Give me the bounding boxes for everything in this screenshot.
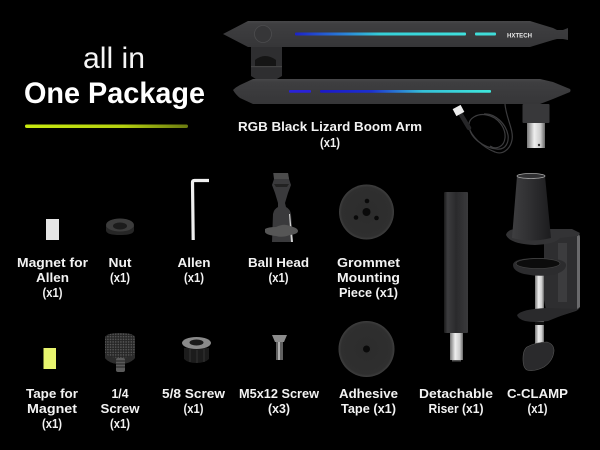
lower arm [233, 79, 570, 104]
label: adhesive tape [339, 386, 398, 416]
label: M5x12 screw: (x3) [268, 401, 290, 416]
yellow-green underline [25, 124, 188, 128]
label: tape for magnet: Tape for [26, 386, 78, 401]
icon: adhesive tape [338, 321, 394, 377]
title: all in One Package [24, 42, 205, 110]
icon: magnet [46, 219, 59, 240]
label: detachable riser: Detachable [419, 386, 493, 401]
label: magnet for allen [17, 255, 88, 300]
pad [513, 258, 566, 276]
label: nut: Nut [108, 255, 132, 270]
label: ball head: (x1) [268, 270, 288, 285]
label: detachable riser [419, 386, 493, 416]
label: magnet for allen: Allen [36, 270, 69, 285]
label: ball head: Ball Head [248, 255, 309, 270]
back plate [544, 234, 580, 320]
top plate [506, 229, 580, 245]
icon: 1/4 screw [105, 333, 135, 372]
label: allen [178, 255, 211, 285]
USB cable [469, 104, 512, 153]
arm connector [522, 104, 550, 123]
icon: M5x12 screw [272, 335, 287, 360]
label: C-clamp: (x1) [528, 401, 548, 416]
label: magnet for allen: Magnet for [17, 255, 88, 270]
label: C-clamp [507, 386, 568, 416]
label: 1/4 screw: Screw [100, 401, 140, 416]
label: tape for magnet: (x1) [42, 416, 62, 431]
icon: ball head [265, 173, 298, 242]
label: boom arm [238, 119, 422, 150]
title: all in One Package: all in [83, 42, 145, 75]
upper arm [223, 21, 568, 47]
label: tape for magnet [26, 386, 78, 431]
label: detachable riser: Riser (x1) [428, 402, 484, 416]
label: boom arm: RGB Black Lizard Boom Arm [238, 119, 422, 134]
icon: 5/8 screw [182, 337, 211, 363]
label: adhesive tape: Adhesive [339, 386, 398, 401]
label: 1/4 screw: (x1) [110, 416, 130, 431]
label: magnet for allen: (x1) [42, 285, 62, 300]
icon: allen key [192, 180, 209, 240]
label: 1/4 screw: 1/4 [112, 386, 129, 401]
icon: C-clamp [506, 174, 580, 371]
label: nut: (x1) [110, 270, 130, 285]
label: grommet mounting piece: Mounting [337, 270, 400, 285]
pressure screw upper [535, 272, 544, 344]
label: M5x12 screw [239, 386, 320, 416]
label: grommet mounting piece [337, 255, 401, 300]
label: nut [108, 255, 132, 285]
label: C-clamp: C-CLAMP [507, 386, 568, 401]
icon: detachable riser [444, 192, 468, 362]
icon: tape for magnet [44, 348, 56, 369]
label: boom arm: (x1) [320, 135, 340, 150]
knob [523, 342, 554, 371]
icon: nut [106, 218, 134, 235]
label: M5x12 screw: M5x12 Screw [239, 386, 320, 401]
icon: RGB boom arm: HXTECH [507, 32, 532, 40]
icon: RGB boom arm [223, 21, 570, 153]
arm joint [251, 46, 282, 83]
icon: grommet mounting piece [339, 184, 394, 240]
label: adhesive tape: Tape (x1) [341, 402, 396, 416]
label: 5/8 screw: 5/8 Screw [162, 386, 226, 401]
label: tape for magnet: Magnet [27, 401, 78, 416]
cone [512, 174, 551, 240]
label: grommet mounting piece: Piece (x1) [339, 286, 398, 300]
label: allen: (x1) [184, 270, 204, 285]
label: grommet mounting piece: Grommet [337, 255, 401, 270]
label: 5/8 screw: (x1) [184, 401, 204, 416]
label: allen: Allen [178, 255, 211, 270]
label: 5/8 screw [162, 386, 226, 416]
title: all in One Package: One Package [24, 77, 205, 110]
label: 1/4 screw [100, 386, 140, 431]
lower plate [517, 308, 578, 322]
label: ball head [248, 255, 309, 285]
